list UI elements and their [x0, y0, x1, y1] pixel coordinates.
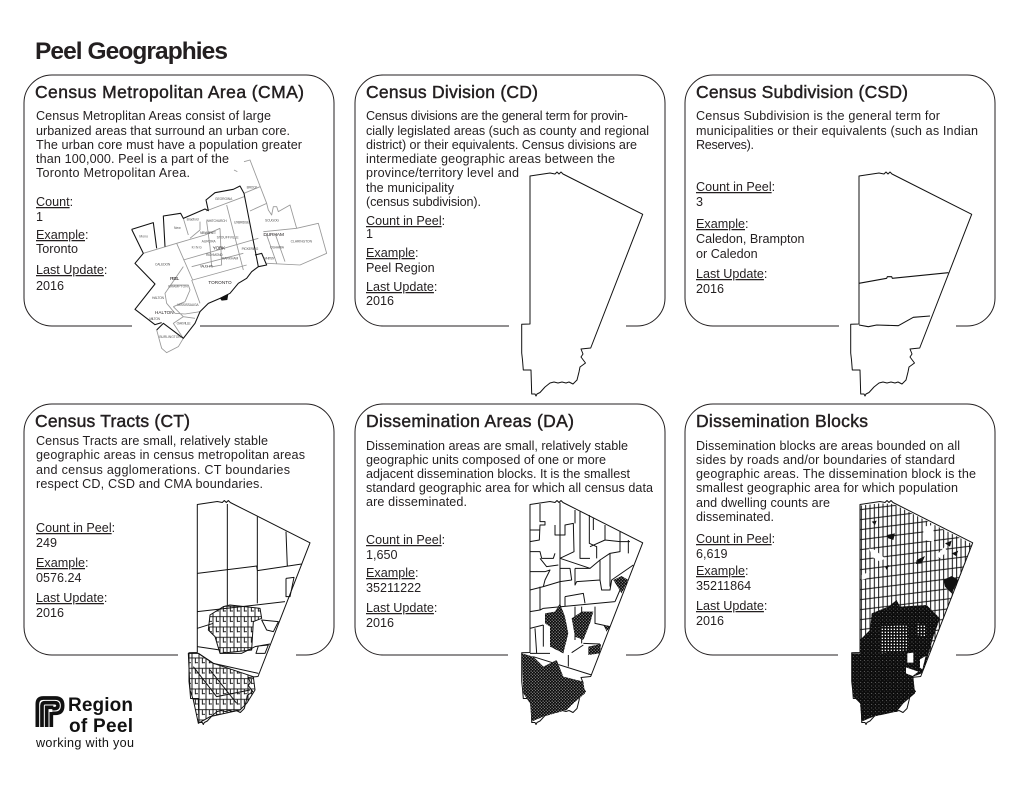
description: Dissemination areas are small, relatively stable: [366, 439, 628, 453]
panel: census tracts: [24, 404, 334, 725]
panel frame: [24, 404, 334, 655]
facts: Count in Peel:: [696, 180, 775, 194]
map: Toronto CMA: DURHAM: [263, 232, 284, 238]
map: Toronto CMA: HALTON: [155, 310, 174, 315]
map: Toronto CMA: [132, 160, 327, 353]
description: and census agglomerations. CT boundaries: [36, 463, 290, 477]
description: are disseminated.: [366, 495, 467, 509]
map: Toronto CMA: WHITCHURCH: [206, 219, 227, 223]
description: Census Metroplitan Areas consist of large: [36, 109, 271, 123]
map: Toronto CMA: VAUGHAN: [200, 264, 214, 268]
map: Toronto CMA: WHITBY: [263, 256, 275, 260]
facts: 6,619: [696, 547, 728, 561]
facts: Last Update:: [36, 591, 107, 605]
facts: Toronto: [36, 242, 78, 256]
map: Toronto CMA: MISSISSAUGA: [177, 303, 199, 307]
facts: 2016: [366, 294, 394, 308]
map: Toronto CMA: UXBRIDGE: [234, 220, 250, 224]
facts: or Caledon: [696, 247, 758, 261]
facts: Example:: [366, 566, 418, 580]
description: province/territory level and: [366, 166, 519, 180]
title: Peel Geographies: [35, 38, 228, 65]
map: dissemination blocks: [852, 500, 975, 724]
facts: 249: [36, 536, 57, 550]
map: Toronto CMA: RICHMOND: [206, 253, 223, 257]
facts: 1: [366, 227, 373, 241]
description: disseminated.: [696, 510, 774, 524]
panel frame: [355, 75, 665, 326]
map: Toronto CMA: OSHAWA: [270, 246, 285, 250]
description: smallest geographic area for which population: [696, 481, 958, 495]
map: Toronto CMA: MARKHAM: [222, 256, 239, 260]
description: [36, 434, 305, 491]
facts: 1,650: [366, 548, 398, 562]
facts: Last Update:: [36, 263, 107, 277]
facts: 3: [696, 195, 703, 209]
heading: Dissemination Areas (DA): [366, 411, 574, 431]
logo: Region of Peel: [35, 695, 134, 750]
panel frame: [24, 75, 334, 326]
map: census tracts: [187, 500, 310, 725]
map: Toronto CMA: SCUGOG: [265, 218, 279, 222]
facts: 2016: [36, 606, 64, 620]
facts: 2016: [696, 282, 724, 296]
map: Toronto CMA: MILTON: [149, 317, 161, 321]
description: [366, 109, 649, 209]
facts: 35211864: [696, 579, 751, 593]
description: the municipality: [366, 181, 455, 195]
facts: Count in Peel:: [696, 532, 775, 546]
map: Toronto CMA: New: [174, 226, 181, 230]
map: Toronto CMA: STOUFFVILLE: [217, 235, 239, 239]
facts: Example:: [36, 556, 88, 570]
tagline: working with you: [35, 736, 134, 750]
map: Toronto CMA: PEEL: [170, 276, 180, 282]
facts: Count in Peel:: [366, 533, 445, 547]
description: municipalities or their equivalents (such as Indian: [696, 124, 978, 138]
map: Toronto CMA: BURLINGTON: [159, 335, 181, 339]
description: Toronto Metropolitan Area.: [36, 166, 190, 180]
map: Toronto CMA: OAKVILLE: [177, 321, 191, 325]
description: district) or their equivalents. Census divisions are: [366, 138, 637, 152]
facts: Example:: [36, 228, 88, 242]
description: [36, 109, 302, 180]
facts: Caledon, Brampton: [696, 232, 805, 246]
map: Toronto CMA: BRAMPTON: [168, 285, 188, 289]
facts: 1: [36, 210, 43, 224]
heading: Census Metropolitan Area (CMA): [35, 82, 304, 102]
panel: census subdivision: [685, 75, 995, 396]
facts: [366, 533, 445, 630]
description: cially legislated areas (such as county and regional: [366, 124, 649, 138]
description: intermediate geographic areas between the: [366, 152, 615, 166]
facts: Last Update:: [696, 599, 767, 613]
map: Toronto CMA: HALTON: [152, 296, 165, 300]
description: Census divisions are the general term for provin-: [366, 109, 628, 123]
facts: 0576.24: [36, 571, 82, 585]
facts: Example:: [696, 564, 748, 578]
facts: 2016: [366, 616, 394, 630]
description: geographic units composed of one or more: [366, 453, 606, 467]
facts: 35211222: [366, 581, 421, 595]
map: Toronto CMA: CLARINGTON: [291, 240, 313, 244]
panel frame: [355, 404, 665, 655]
facts: [696, 180, 805, 296]
facts: Example:: [696, 217, 748, 231]
facts: 2016: [36, 279, 64, 293]
description: Reserves).: [696, 138, 754, 152]
map: dissemination areas: [522, 500, 643, 724]
description: sides by roads and/or boundaries of standard: [696, 453, 955, 467]
map: Toronto CMA: YORK: [213, 245, 226, 251]
map: three municipalities: [851, 172, 972, 396]
description: urbanized areas that surround an urban core.: [36, 124, 290, 138]
panel: census metropolitan area: [24, 75, 334, 353]
facts: Count in Peel:: [36, 521, 115, 535]
description: adjacent dissemination blocks. It is the smallest: [366, 467, 630, 481]
heading: Census Tracts (CT): [35, 411, 190, 431]
facts: Last Update:: [696, 267, 767, 281]
heading: Dissemination Blocks: [696, 411, 868, 431]
description: than 100,000. Peel is a part of the: [36, 152, 229, 166]
map: Toronto CMA: CALEDON: [155, 262, 171, 266]
facts: Example:: [366, 246, 418, 260]
panel: dissemination areas: [355, 404, 665, 724]
icon: stylized P: [37, 698, 63, 727]
map: Toronto CMA: KING: [192, 246, 202, 250]
facts: [366, 214, 445, 308]
panel: census division: [355, 75, 665, 396]
description: standard geographic area for which all census data: [366, 481, 653, 495]
map: Toronto CMA: TORONTO: [208, 280, 232, 285]
description: geographic areas in census metropolitan areas: [36, 448, 305, 462]
facts: [696, 532, 775, 628]
description: Dissemination blocks are areas bounded on all: [696, 439, 960, 453]
panel frame: [685, 75, 995, 326]
facts: 2016: [696, 614, 724, 628]
map: Toronto CMA: Mono: [139, 234, 148, 238]
logo wordmark: Region: [68, 695, 133, 716]
panel frame: [685, 404, 995, 655]
description: (census subdivision).: [366, 195, 481, 209]
description: The urban core must have a population greater: [36, 138, 302, 152]
facts: Last Update:: [366, 280, 437, 294]
description: Census Subdivision is the general term for: [696, 109, 940, 123]
facts: Last Update:: [366, 601, 437, 615]
heading: Census Division (CD): [366, 82, 538, 102]
map: Toronto CMA: PICKERING: [242, 247, 259, 251]
facts: Count:: [36, 195, 73, 209]
description: [696, 109, 978, 152]
map: Toronto CMA: GEORGINA: [215, 197, 233, 201]
description: geographic areas. The dissemination block is the: [696, 467, 976, 481]
map: Toronto CMA: BROCK: [247, 186, 258, 190]
description: [696, 439, 976, 524]
map: Toronto CMA: Bradford: [187, 218, 199, 222]
description: Census Tracts are small, relatively stable: [36, 434, 268, 448]
facts: Peel Region: [366, 261, 435, 275]
facts: Count in Peel:: [366, 214, 445, 228]
facts: [36, 195, 107, 293]
description: [366, 439, 653, 509]
logo: Region of Peel: of Peel: [69, 716, 133, 737]
panel: dissemination blocks: [685, 404, 995, 724]
description: respect CD, CSD and CMA boundaries.: [36, 477, 263, 491]
map: Toronto CMA: NEWMARKET: [200, 231, 216, 235]
map: Toronto CMA: AURORA: [202, 240, 216, 244]
description: and dwelling counts are: [696, 496, 830, 510]
map: Peel region outline: [522, 172, 643, 396]
facts: [36, 521, 115, 620]
heading: Census Subdivision (CSD): [696, 82, 908, 102]
